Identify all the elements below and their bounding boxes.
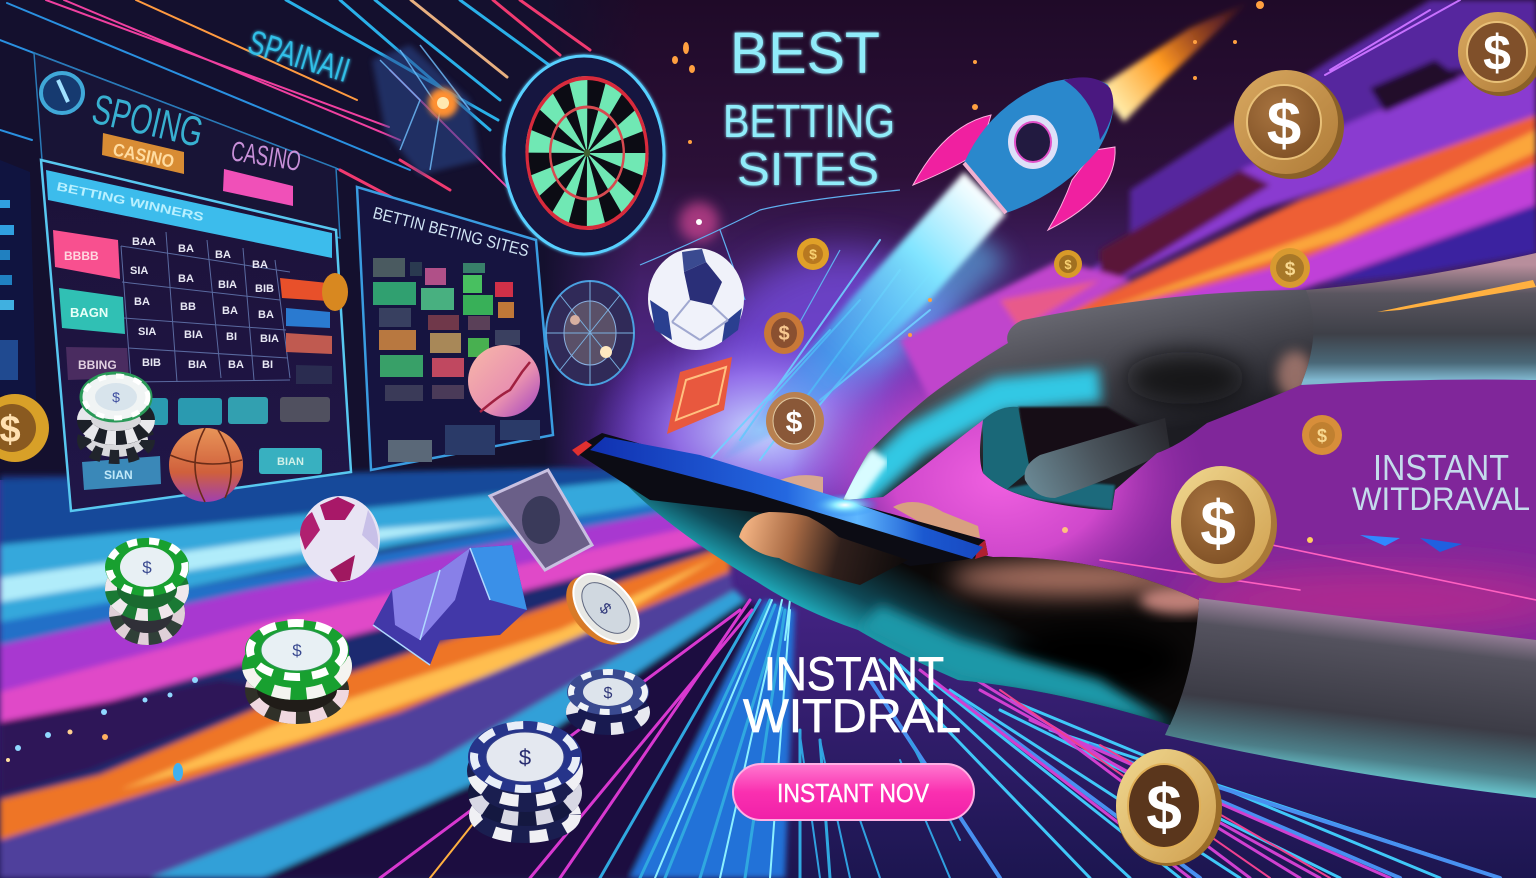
coin: right middle: $ [1200, 487, 1236, 559]
table buttons [144, 398, 168, 425]
panel: betting table: BB [180, 301, 196, 313]
coin: small e [1302, 415, 1342, 455]
text: instant withdrawal centre: WITDRAL [743, 689, 961, 742]
energy swirl [372, 45, 480, 175]
rocket flame and trail [720, 2, 1248, 462]
panel: betting table: BA [215, 249, 231, 261]
phone screen [590, 437, 983, 559]
panel: betting table: BIA [188, 359, 207, 371]
right dashes [1360, 535, 1462, 552]
text: instant withdrawal centre [743, 647, 961, 742]
sites rows [373, 258, 540, 462]
coin: small b: $ [809, 246, 817, 262]
coin: bottom: $ [1146, 771, 1182, 843]
chip stack: green center [245, 620, 349, 718]
particle accents [672, 1, 1313, 543]
sign text: SPAINAII: SPAINAII [244, 23, 354, 90]
wrist shadow [1125, 352, 1245, 404]
coin: small c: $ [1064, 257, 1072, 272]
pink tag [223, 169, 293, 206]
panel: betting table: BA [252, 259, 268, 271]
index underside glow [850, 385, 1100, 500]
panel: betting table: BIA [260, 333, 279, 345]
palm shade [983, 407, 1030, 495]
panel: betting table: BIA [218, 279, 237, 291]
chip stack: green left: $ [142, 558, 152, 577]
table left labels: BBBB [64, 249, 99, 263]
icon: basketball [169, 428, 243, 502]
coin: top right: $ [1267, 90, 1301, 159]
coin: center: $ [786, 406, 803, 439]
table left labels: BAGN [70, 305, 108, 320]
sign text: SPOING: SPOING [88, 85, 208, 156]
table grid [121, 232, 290, 382]
title: best betting sites: BEST [730, 21, 880, 86]
title: best betting sites: BETTING [723, 95, 895, 147]
thumb [1025, 418, 1170, 498]
phone body [572, 433, 988, 566]
chip stack: blue small [567, 669, 649, 729]
left edge panel [0, 160, 36, 400]
panel: betting table: BIAN [277, 456, 304, 468]
panel: betting table: BIB [255, 283, 274, 295]
chip stack: upper left [81, 373, 151, 457]
coin: corner: $ [1483, 25, 1511, 81]
wall panel: upper left sign [34, 23, 480, 238]
icon: rocket [913, 77, 1115, 230]
panel: betting table: BA [258, 309, 274, 321]
coin: right middle [1171, 466, 1277, 583]
coin: small c [1054, 250, 1082, 278]
text: instant withdrawal right: INSTANT [1373, 447, 1509, 488]
coin: small a [764, 312, 804, 354]
panel: betting table: BA [134, 296, 150, 308]
panel: betting table: BA [222, 305, 238, 317]
button: instant now: INSTANT NOV [777, 778, 930, 808]
sleeve: upper [1301, 253, 1536, 385]
icon: volleyball [300, 496, 380, 582]
icon: soccer ball [648, 248, 744, 350]
table header bar: BETTING WINNERS [55, 179, 205, 224]
chip stack: blue bottom: $ [519, 745, 531, 770]
table right cells [280, 278, 328, 301]
palm [620, 480, 1220, 730]
sites heading: BETTIN BETING SITES [371, 203, 531, 261]
coin: left edge [0, 394, 49, 462]
panel: betting table: BIA [184, 329, 203, 341]
sleeve: lower [1165, 598, 1536, 798]
chip stack: upper left: $ [112, 389, 120, 405]
table left labels: BBING [78, 358, 117, 372]
table left labels [53, 230, 129, 380]
phone [572, 433, 988, 566]
text: instant withdrawal centre: INSTANT [764, 647, 944, 700]
chip stack: blue bottom [468, 721, 582, 837]
city lights [6, 677, 198, 762]
diamond sparkle [173, 763, 183, 781]
panel: betting table: BI [262, 359, 273, 371]
lower hand and sleeve [620, 475, 1536, 798]
icon: banknote [490, 470, 592, 570]
coin: corner [1458, 12, 1536, 96]
fingertip glow [845, 455, 880, 502]
text: instant withdrawal right [1352, 447, 1530, 517]
text: instant withdrawal right: WITDRAVAL [1352, 481, 1530, 517]
button: instant now [733, 764, 974, 820]
chip stack: green center: $ [292, 641, 302, 660]
coin: small a: $ [778, 323, 790, 345]
icon: card [667, 357, 732, 434]
gold medal [322, 273, 348, 311]
sleeve streak [1377, 280, 1536, 312]
dartboard [504, 56, 664, 254]
panel: betting table: BA [228, 359, 244, 371]
thumb over phone [739, 512, 908, 585]
light streaks: upper right [900, 0, 1536, 400]
panel: betting table: SIA [138, 326, 156, 338]
coin: small d: $ [1285, 259, 1296, 280]
panel: betting table: SIA [130, 265, 148, 277]
rocket fins [913, 115, 991, 185]
panel: betting table [41, 160, 351, 511]
panel: betting table: BA [178, 273, 194, 285]
fingers behind phone [780, 475, 823, 495]
coin: top right [1234, 70, 1344, 179]
casino label: CASINO [229, 135, 303, 177]
hand pointing [843, 290, 1313, 510]
chip: single gold [553, 559, 651, 659]
chip stack: blue small: $ [604, 685, 613, 702]
icon: pink ball [468, 345, 540, 417]
panel: betting table: BAA [132, 236, 156, 248]
rocket window [1008, 115, 1058, 169]
panel: betting table: BI [226, 331, 237, 343]
sparkle burst [640, 190, 900, 340]
chip: single gold: $ [596, 600, 614, 618]
wrist highlight [1277, 351, 1313, 399]
title: best betting sites [723, 21, 895, 195]
coin: small d [1270, 248, 1310, 288]
coin: center [766, 392, 824, 450]
orange casino tag: CASINO [111, 139, 176, 172]
rocket body [964, 78, 1113, 213]
coin: small b [797, 238, 829, 270]
icon: roulette wheel [546, 281, 634, 385]
icon: crystal [373, 545, 527, 665]
coin: small e: $ [1317, 426, 1327, 446]
chip stack: green left [105, 538, 189, 639]
panel: betting sites table [357, 187, 553, 470]
coin: left edge: $ [0, 409, 21, 451]
table header bar [46, 170, 332, 258]
coin: bottom [1116, 749, 1222, 866]
panel: betting table: BA [178, 243, 194, 255]
chips [81, 373, 651, 837]
logo badge [41, 73, 83, 113]
light streaks: left and lower left [0, 468, 795, 878]
upper hand and sleeve [830, 253, 1536, 520]
panel: betting table: SIAN [104, 468, 133, 482]
panel: betting table: BIB [142, 357, 161, 369]
title: best betting sites: SITES [737, 143, 879, 195]
finger gap [1017, 405, 1140, 464]
